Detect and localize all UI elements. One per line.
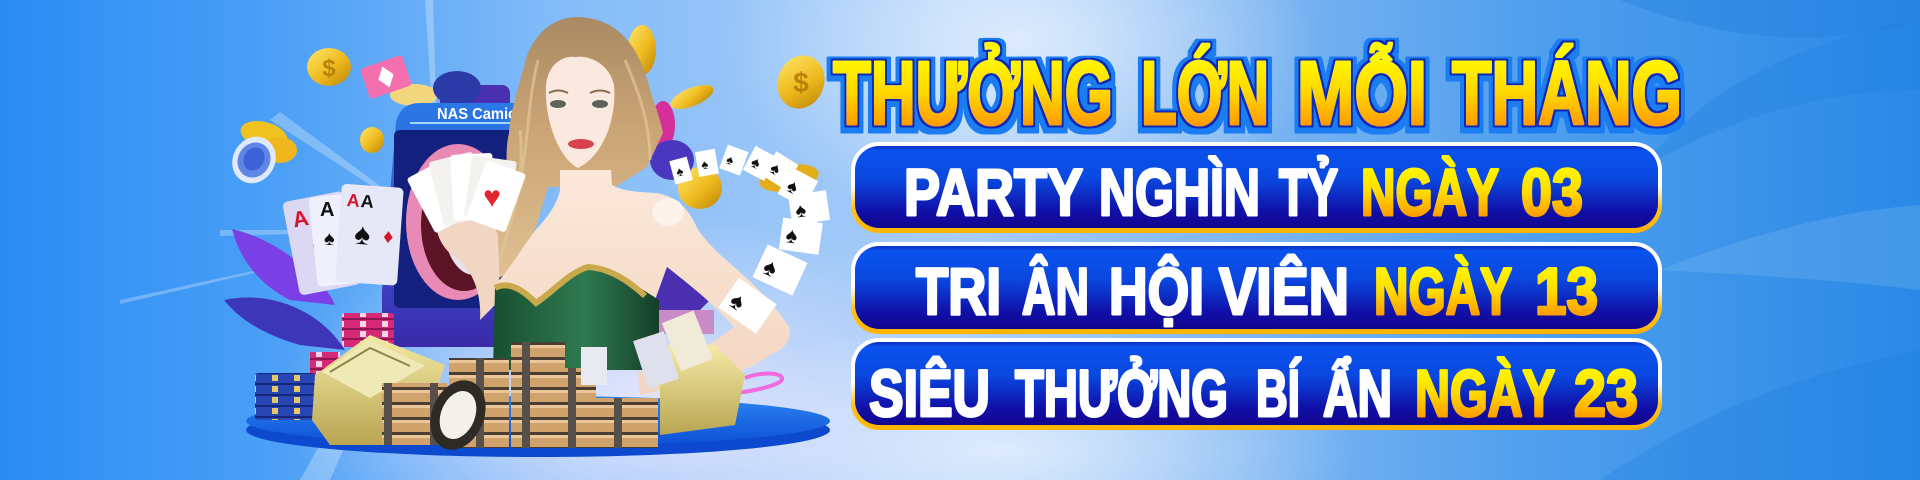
label: HỘI <box>1109 254 1204 328</box>
card trail: ♠ <box>783 176 802 199</box>
date: 23 <box>1574 356 1638 430</box>
playing cards left: A <box>290 205 311 233</box>
playing cards left: ♠ <box>324 228 335 250</box>
label: TỶ <box>1279 155 1338 229</box>
panel: party nghìn tỷ <box>851 142 1662 233</box>
gold coin stacks <box>382 342 658 458</box>
playing cards left: A <box>320 199 334 221</box>
icon: floating gold coins: $ <box>322 55 336 82</box>
cash bundles <box>312 335 745 445</box>
machine label: NAS Camio <box>437 106 517 123</box>
date: 03 <box>1521 155 1583 229</box>
label: VIÊN <box>1219 254 1349 328</box>
title: THƯỞNG <box>833 42 1113 144</box>
label: NGHÌN <box>1099 155 1260 229</box>
card fan: ♥ <box>483 181 501 214</box>
card fan <box>406 151 526 234</box>
card trail: ♠ <box>748 154 764 173</box>
title: THÁNG <box>1452 43 1682 144</box>
torso and right arm <box>497 170 790 395</box>
playing cards left: A <box>360 191 374 212</box>
card trail: ♠ <box>724 287 750 317</box>
pink chips <box>310 310 714 382</box>
playing cards left <box>282 184 404 296</box>
panel: tri ân hội viên <box>851 242 1662 334</box>
icon: blue poker chip <box>224 129 284 191</box>
title <box>833 42 1682 144</box>
left arm and hand <box>436 208 500 320</box>
label <box>904 155 1338 229</box>
platform <box>246 396 830 457</box>
shoulder highlight <box>652 198 684 226</box>
card trail: ♠ <box>724 152 736 168</box>
face <box>546 57 614 168</box>
card trail: ♠ <box>794 199 808 223</box>
label: ÂN <box>1022 254 1089 328</box>
card trail: ♠ <box>700 156 709 172</box>
brows, eyes and lips <box>549 90 610 149</box>
playing cards left: ♥ <box>309 228 334 267</box>
blue chips stack <box>255 373 315 420</box>
card trail: ♠ <box>759 253 782 283</box>
label: BÍ <box>1256 356 1301 430</box>
label <box>869 356 1392 430</box>
title: LỚN <box>1141 43 1269 144</box>
machine <box>382 71 530 347</box>
neon ring <box>700 374 782 395</box>
face cards near hand <box>581 310 713 389</box>
date: NGÀY <box>1415 356 1555 430</box>
icon: purple leaves <box>224 101 710 350</box>
woman <box>436 17 790 395</box>
date: 13 <box>1535 254 1598 328</box>
hair back <box>488 17 663 283</box>
label <box>916 254 1349 328</box>
playing cards left: ♠ <box>353 218 372 252</box>
label: PARTY <box>904 155 1083 229</box>
date: NGÀY <box>1361 155 1499 229</box>
label: SIÊU <box>869 356 990 430</box>
icon: pink diamond card <box>360 55 412 99</box>
roulette wheel <box>406 144 510 300</box>
label: TRI <box>916 254 1001 328</box>
panel: siêu thưởng bí ẩn <box>851 338 1662 430</box>
label: THƯỞNG <box>1015 356 1228 430</box>
card trail: ♠ <box>784 222 800 249</box>
playing cards left: ♦ <box>382 226 394 248</box>
illustration: casino hostess scene <box>224 17 832 458</box>
playing cards left: A <box>346 190 360 211</box>
date: NGÀY <box>1374 254 1512 328</box>
icon: floating gold coins: $ <box>793 67 809 98</box>
card trail <box>669 145 830 334</box>
icon: floating gold coins <box>237 25 832 209</box>
hair strands <box>498 60 650 265</box>
title: MỖI <box>1297 42 1427 144</box>
card trail: ♠ <box>674 163 685 180</box>
dress <box>493 267 659 370</box>
label: ẨN <box>1323 356 1392 430</box>
card trail: ♠ <box>767 158 784 179</box>
